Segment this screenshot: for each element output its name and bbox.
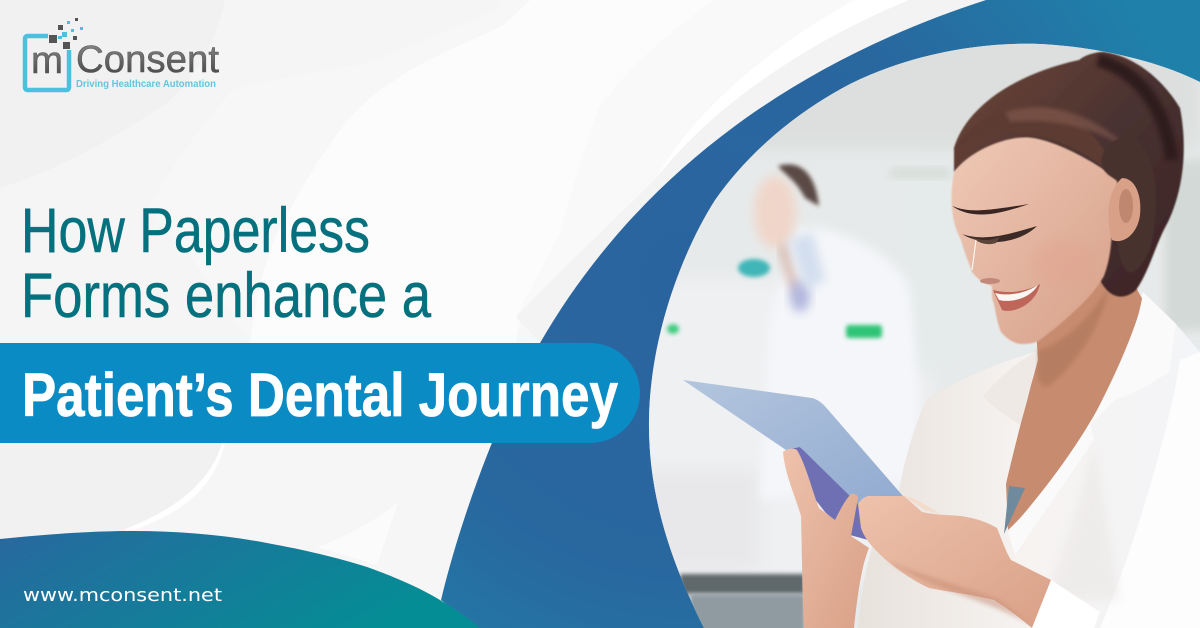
- logo wordmark: Consent: [76, 39, 219, 81]
- blurred colleague: [667, 164, 918, 500]
- face: [952, 137, 1118, 344]
- title: How Paperless: [21, 196, 370, 266]
- tablet: [683, 380, 922, 540]
- blurred lab background: [640, 30, 1200, 628]
- hair back: [954, 52, 1184, 297]
- logo tagline: Driving Healthcare Automation: [76, 79, 216, 90]
- title banner: [0, 343, 640, 443]
- blue curved shape: [441, 0, 1200, 628]
- right collar: [1008, 292, 1176, 555]
- lab coat: [858, 292, 1200, 628]
- hair front strands: [954, 125, 1118, 183]
- ear: [1108, 178, 1140, 241]
- bottom website hill: [0, 531, 480, 628]
- coat cuff: [1032, 580, 1100, 628]
- logo wordmark: m: [31, 40, 63, 82]
- icon: data squares: [49, 18, 83, 49]
- facial features: [952, 204, 1040, 311]
- title banner: Patient’s Dental Journey: [22, 361, 618, 429]
- left lapel: [988, 353, 1034, 425]
- bottom website hill: www.mconsent.net: [23, 585, 222, 606]
- title: Forms enhance a: [21, 261, 432, 331]
- undershirt: [1004, 486, 1025, 534]
- hand holding tablet (left): [783, 449, 869, 628]
- title: [21, 196, 432, 331]
- logo: [25, 18, 219, 90]
- photo: doctor with tablet: [640, 30, 1200, 628]
- neck and chest skin: [1006, 280, 1142, 530]
- icon: tablet outline: [25, 36, 69, 90]
- hand holding tablet (right): [858, 496, 1051, 628]
